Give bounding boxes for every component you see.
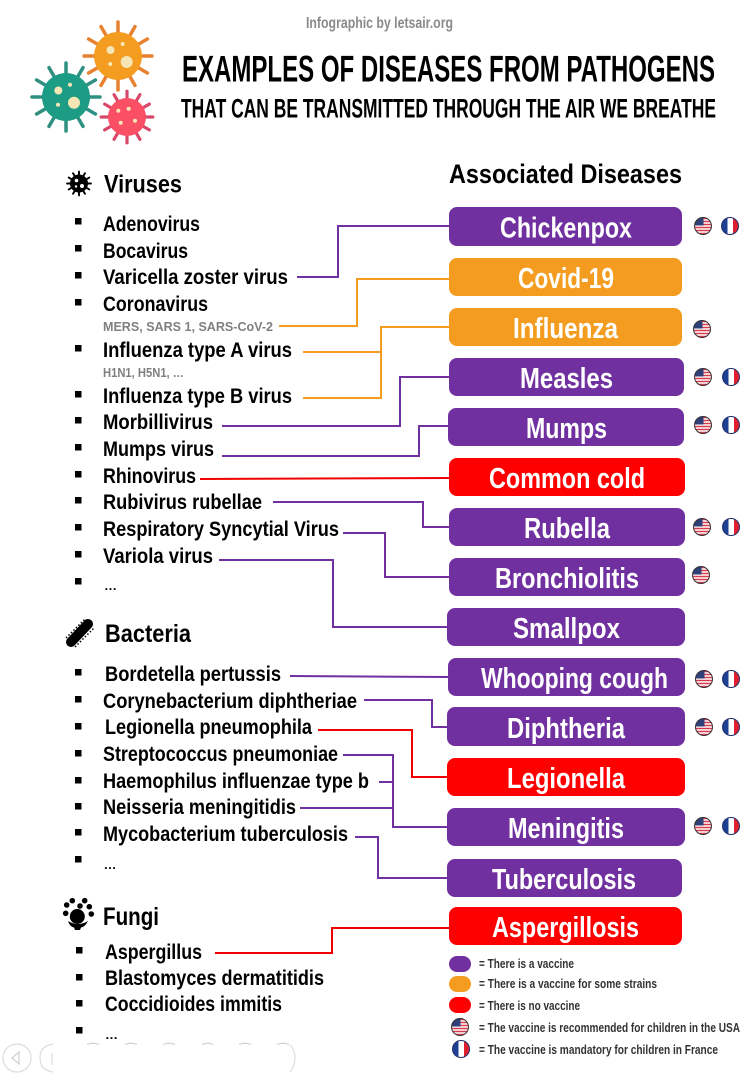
- arrow: bordetella to whooping cough: [290, 676, 448, 677]
- pill: tuberculosis: [447, 859, 682, 897]
- item: coronavirus: MERS, SARS 1, SARS-CoV-2: [103, 320, 273, 334]
- credit line: Infographic by letsair.org: [306, 15, 453, 32]
- slide viewer controls: [3, 1043, 295, 1072]
- legend row: recommended in the USA: [451, 1018, 740, 1036]
- pill: tuberculosis: Tuberculosis: [492, 864, 636, 896]
- arrow: mycobacterium to tuberculosis: [355, 837, 447, 878]
- item: influenza type A virus: Influenza type A virus: [103, 339, 292, 362]
- pill: common cold: Common cold: [489, 463, 645, 495]
- item: neisseria meningitidis: Neisseria meningitidis: [103, 796, 296, 819]
- pill: covid-19: Covid-19: [518, 263, 614, 295]
- item: haemophilus influenzae type b: Haemophilus influenzae type b: [103, 770, 369, 793]
- arrow: rhinovirus to common cold: [200, 478, 449, 479]
- item: more viruses: …: [104, 578, 117, 593]
- item: rhinovirus: Rhinovirus: [103, 465, 196, 488]
- arrow: legionella to legionella disease: [318, 730, 447, 777]
- item: blastomyces dermatitidis: Blastomyces dermatitidis: [105, 967, 324, 990]
- pill: whooping cough: [448, 658, 685, 696]
- flag: bronchiolitis: [692, 566, 710, 584]
- arrow: rubivirus to rubella: [273, 502, 449, 527]
- pill: measles: Measles: [520, 363, 613, 395]
- pill: influenza: [449, 308, 682, 346]
- item: coronavirus: [75, 293, 273, 334]
- pill: legionella: [447, 758, 685, 796]
- flags: diphtheria: [695, 718, 740, 736]
- pill: whooping cough: Whooping cough: [481, 663, 668, 695]
- heading: viruses: Viruses: [104, 170, 182, 198]
- item: legionella pneumophila: Legionella pneumophila: [105, 716, 312, 739]
- item: bocavirus: Bocavirus: [103, 240, 188, 263]
- item: variola virus: Variola virus: [103, 545, 213, 568]
- flags: chickenpox: [694, 217, 739, 235]
- icon: bacterium: [66, 619, 94, 647]
- arrow: varicella to chickenpox: [297, 226, 449, 277]
- legend row: vaccine: [449, 956, 574, 972]
- legend row: no vaccine: [449, 997, 580, 1013]
- item: more bacteria: …: [104, 857, 116, 872]
- pill: common cold: [449, 458, 685, 496]
- pill: rubella: [449, 508, 685, 546]
- pill: aspergillosis: [449, 907, 682, 945]
- pill: covid-19: [449, 258, 682, 296]
- flags: mumps: [694, 416, 740, 434]
- arrow: morbillivirus to measles: [222, 377, 449, 426]
- item: adenovirus: Adenovirus: [103, 213, 200, 236]
- arrow: variola to smallpox: [219, 560, 447, 627]
- item: coccidioides immitis: Coccidioides immitis: [105, 993, 282, 1016]
- item: rhinovirus: [75, 465, 196, 488]
- pill: smallpox: [447, 608, 685, 646]
- item: influenza type A virus: H1N1, H5N1, …: [103, 366, 184, 380]
- item: more viruses: [75, 578, 117, 593]
- item: bordetella pertussis: Bordetella pertussis: [105, 663, 281, 686]
- flags: rubella: [693, 518, 740, 536]
- legend row: vaccine: = There is a vaccine: [479, 957, 574, 971]
- list: viruses: [75, 213, 339, 593]
- item: bocavirus: [75, 240, 188, 263]
- legend row: vaccine for some strains: = There is a vaccine for some strains: [479, 977, 657, 991]
- heading: fungi: Fungi: [103, 903, 159, 931]
- pill: smallpox: Smallpox: [513, 613, 620, 645]
- arrow: respiratory syncytial virus to bronchiolitis: [343, 533, 449, 577]
- flag: influenza: [693, 320, 711, 338]
- arrow: mumps virus to mumps: [222, 426, 448, 456]
- item: corynebacterium diphtheriae: Corynebacterium diphtheriae: [103, 690, 357, 713]
- flags: measles: [694, 368, 740, 386]
- pill: bronchiolitis: Bronchiolitis: [495, 563, 639, 595]
- icon: group of three viruses: [32, 22, 153, 143]
- pill: rubella: Rubella: [524, 513, 611, 545]
- list: bacteria: [75, 663, 369, 872]
- flags: whooping cough: [695, 670, 740, 688]
- item: mycobacterium tuberculosis: Mycobacterium tuberculosis: [103, 823, 348, 846]
- pill: diphtheria: Diphtheria: [507, 713, 626, 745]
- pill: chickenpox: Chickenpox: [500, 212, 632, 244]
- pill: influenza: Influenza: [513, 313, 619, 345]
- item: more fungi: [76, 1027, 118, 1042]
- pill: legionella: Legionella: [507, 763, 626, 795]
- arrow: corynebacterium to diphtheria: [364, 700, 447, 727]
- item: rubivirus rubellae: Rubivirus rubellae: [103, 491, 262, 514]
- item: influenza type B virus: Influenza type B virus: [103, 385, 292, 408]
- pill: chickenpox: [449, 207, 682, 246]
- heading: bacteria: Bacteria: [105, 620, 192, 648]
- item: varicella zoster virus: Varicella zoster virus: [103, 266, 288, 289]
- pill: diphtheria: [447, 707, 685, 746]
- item: more fungi: …: [105, 1027, 118, 1042]
- pill: meningitis: Meningitis: [508, 813, 624, 845]
- item: mumps virus: Mumps virus: [103, 438, 214, 461]
- item: respiratory syncytial virus: Respiratory Syncytial Virus: [103, 518, 339, 541]
- item: adenovirus: [75, 213, 200, 236]
- legend row: no vaccine: = There is no vaccine: [479, 999, 580, 1013]
- legend row: vaccine for some strains: [449, 976, 657, 992]
- flags: meningitis: [694, 817, 740, 835]
- item: more bacteria: [75, 856, 116, 872]
- item: aspergillus: Aspergillus: [105, 941, 202, 964]
- heading: associated diseases: Associated Diseases: [449, 159, 682, 189]
- pill: meningitis: [447, 808, 685, 846]
- item: influenza type A virus: [75, 339, 292, 380]
- item: coronavirus: Coronavirus: [103, 293, 208, 316]
- list: fungi: [76, 941, 324, 1042]
- item: aspergillus: [76, 941, 202, 964]
- arrow: aspergillus to aspergillosis: [215, 928, 449, 953]
- pill: aspergillosis: Aspergillosis: [492, 912, 639, 944]
- icon: fungi: [63, 898, 94, 930]
- arrow: influenza viruses to influenza: [303, 327, 449, 398]
- icon: virus: [67, 172, 91, 195]
- pill: mumps: [448, 408, 684, 446]
- legend: [449, 956, 740, 1058]
- item: streptococcus pneumoniae: Streptococcus pneumoniae: [103, 743, 338, 766]
- pill: measles: [449, 358, 684, 396]
- pill: mumps: Mumps: [526, 413, 607, 445]
- arrow: coronavirus to covid-19: [279, 279, 449, 326]
- item: morbillivirus: Morbillivirus: [103, 411, 213, 434]
- pill: bronchiolitis: [449, 558, 685, 596]
- arrow: three bacteria to meningitis: [300, 755, 447, 827]
- legend row: mandatory in France: [452, 1040, 718, 1058]
